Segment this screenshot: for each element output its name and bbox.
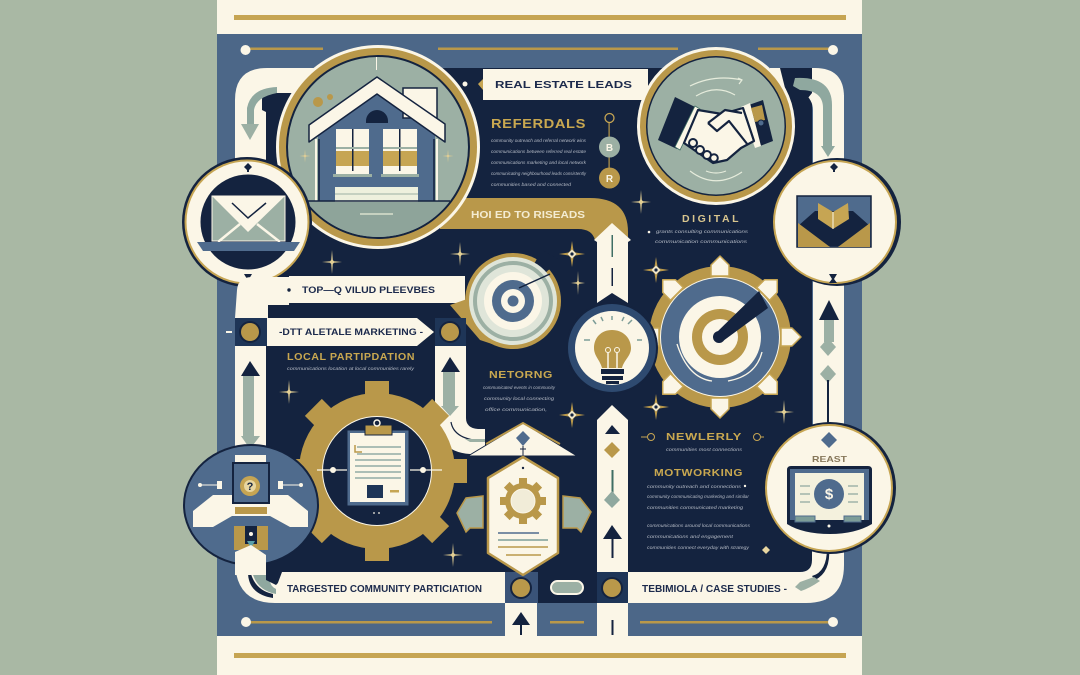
arrow: upper centre <box>594 223 631 303</box>
icon: laptop with dollar: $ <box>825 486 834 503</box>
icon: clipboard <box>317 420 442 514</box>
navy main panel <box>266 68 812 572</box>
referrals text: communications between referred real estate <box>491 149 586 155</box>
digital text <box>648 229 749 245</box>
side arrow right <box>563 496 591 532</box>
gold ribbon: HOI ED TO RISEADS <box>471 210 585 221</box>
icon: lightbulb <box>584 316 642 384</box>
motworking text: communications and engagement <box>647 534 734 540</box>
networking text: communicated events in community <box>483 385 556 391</box>
networking heading: NETORNG <box>489 369 553 381</box>
side arrow left <box>457 496 483 532</box>
referral nodes: R <box>606 174 614 185</box>
right envelope circle <box>773 158 901 286</box>
bottom gold rule <box>234 653 846 658</box>
digital text: communication communications <box>655 239 748 245</box>
lightbulb circle <box>566 302 658 394</box>
referrals text: community outreach and referral network wins <box>491 138 587 144</box>
marketing banner: -DTT ALETALE MARKETING - <box>279 327 423 338</box>
digital heading: DIGITAL <box>682 213 739 225</box>
target circle <box>450 250 561 349</box>
newlerly text: communities most connections <box>666 447 743 453</box>
icon: folder envelope <box>797 196 871 247</box>
motworking text: communities connect everyday with strategy <box>647 545 750 551</box>
networking text: community local connecting <box>484 396 554 402</box>
cream frame: top right corner <box>770 68 844 170</box>
laptop circle <box>764 422 896 554</box>
referrals text: communities based and connected <box>491 182 571 188</box>
referrals heading: REFERDALS <box>491 117 586 131</box>
newlerly heading: NEWLERLY <box>666 431 742 443</box>
icon: curved sage arrow right <box>793 78 835 157</box>
cream frame: top left corner <box>235 68 330 170</box>
digital text: grants consulting communications <box>656 229 749 235</box>
icon: double arrow right column <box>819 300 839 425</box>
icon: curved sage arrow <box>241 87 277 140</box>
icon: envelope <box>197 196 300 251</box>
icon: gear in shield <box>500 478 546 524</box>
roof badge <box>468 423 577 456</box>
bottom left corner <box>235 540 505 603</box>
blue phone circle <box>183 444 319 575</box>
newlerly heading <box>641 431 764 443</box>
icon: handset: ? <box>247 481 254 493</box>
motworking text: communities communicated marketing <box>647 505 743 511</box>
sparkles <box>279 190 794 567</box>
referral nodes <box>599 114 620 188</box>
motworking text: community outreach and connections <box>647 484 742 490</box>
motworking text: community communicating marketing and similar <box>647 494 749 500</box>
top slider lines <box>240 45 838 55</box>
bottom cells <box>505 572 628 603</box>
poster sheet <box>217 0 862 675</box>
icon: handshake <box>658 78 773 181</box>
banner: testimonials: TEBIMIOLA / CASE STUDIES - <box>642 584 787 595</box>
networking text <box>483 385 556 413</box>
gold ribbon <box>440 198 628 240</box>
inner U arrow <box>435 346 485 454</box>
envelope circle <box>182 157 312 287</box>
top gold rule <box>234 15 846 20</box>
referrals text <box>491 138 587 188</box>
icon: house <box>300 57 454 214</box>
banner: targeted community participation: TARGESTED COMMUNITY PARTICIATION <box>287 584 482 595</box>
motworking text <box>647 484 751 551</box>
real estate leads banner: REAL ESTATE LEADS <box>495 79 632 91</box>
marketing banner <box>226 318 466 346</box>
shield badge <box>488 457 558 575</box>
centre tall column <box>597 405 628 572</box>
bottom right corner <box>628 545 844 603</box>
referral nodes: B <box>606 143 613 154</box>
handshake circle <box>637 47 795 205</box>
top-valued banner: TOP—Q VILUD PLEEVBES <box>302 285 435 295</box>
local participation heading: LOCAL PARTIPDATION <box>287 351 415 363</box>
referrals text: communications marketing and local network <box>491 160 587 166</box>
local participation text: communications location at local communities rarely <box>287 366 415 372</box>
right column <box>813 275 844 435</box>
top-valued banner <box>235 276 465 318</box>
gold gear <box>287 381 467 561</box>
motworking heading: MOTWORKING <box>654 467 743 479</box>
house circle <box>276 45 480 249</box>
motworking text: communications around local communications <box>647 523 751 529</box>
networking text: office communication, <box>485 407 547 413</box>
blue gear target <box>639 256 801 418</box>
real estate leads banner <box>462 69 648 100</box>
laptop circle: REAST <box>812 454 848 464</box>
referrals text: communicating neighbourhood leads consistently <box>491 171 587 177</box>
bottom blue strip details <box>241 603 838 636</box>
left column <box>235 346 266 471</box>
